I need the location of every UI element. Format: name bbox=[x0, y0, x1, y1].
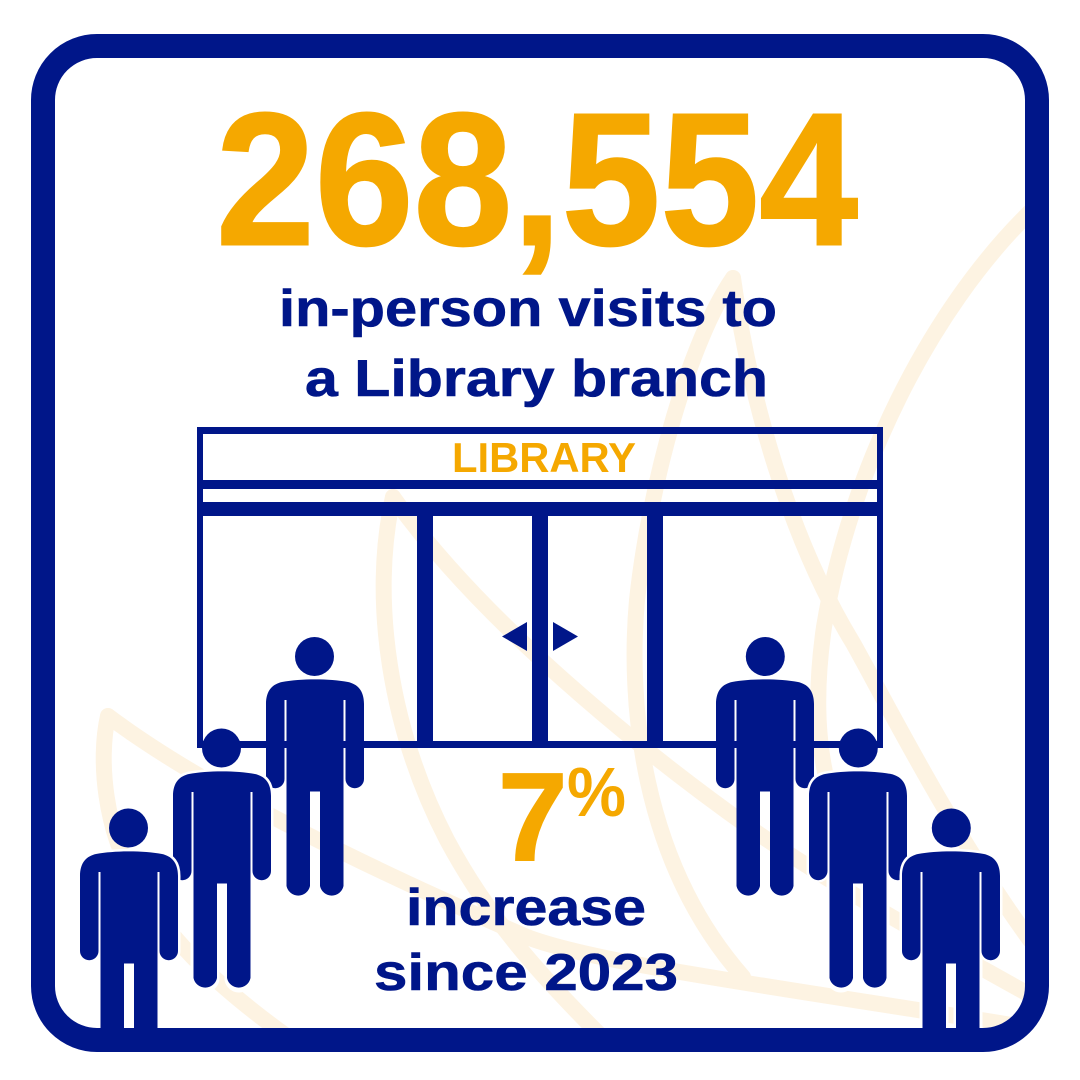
percent increase: 7 bbox=[498, 748, 568, 887]
subtitle: in-person visits to a Library branch: a Library branch bbox=[305, 350, 768, 408]
door arrows bbox=[502, 622, 578, 651]
library sign: LIBRARY bbox=[452, 434, 636, 481]
person front right bbox=[900, 808, 1002, 1028]
person back right bbox=[716, 637, 814, 896]
people: right group bbox=[716, 637, 1000, 1070]
increase since 2023: since 2023 bbox=[374, 944, 678, 1002]
background leaf pattern bbox=[104, 212, 1030, 1035]
library building bbox=[197, 427, 883, 748]
person middle left bbox=[173, 728, 271, 990]
person front left bbox=[80, 808, 180, 1028]
increase since 2023 bbox=[374, 879, 678, 1002]
person middle right bbox=[809, 728, 907, 990]
subtitle: in-person visits to a Library branch bbox=[279, 280, 777, 408]
building frame bbox=[197, 427, 883, 748]
percent increase bbox=[498, 748, 626, 887]
big number: 268,554 bbox=[216, 74, 858, 286]
subtitle: in-person visits to a Library branch: in-person visits to bbox=[279, 280, 777, 338]
person back left bbox=[266, 637, 364, 896]
increase since 2023: increase bbox=[406, 879, 646, 937]
people: left group bbox=[80, 637, 364, 1070]
percent increase: % bbox=[567, 753, 626, 831]
